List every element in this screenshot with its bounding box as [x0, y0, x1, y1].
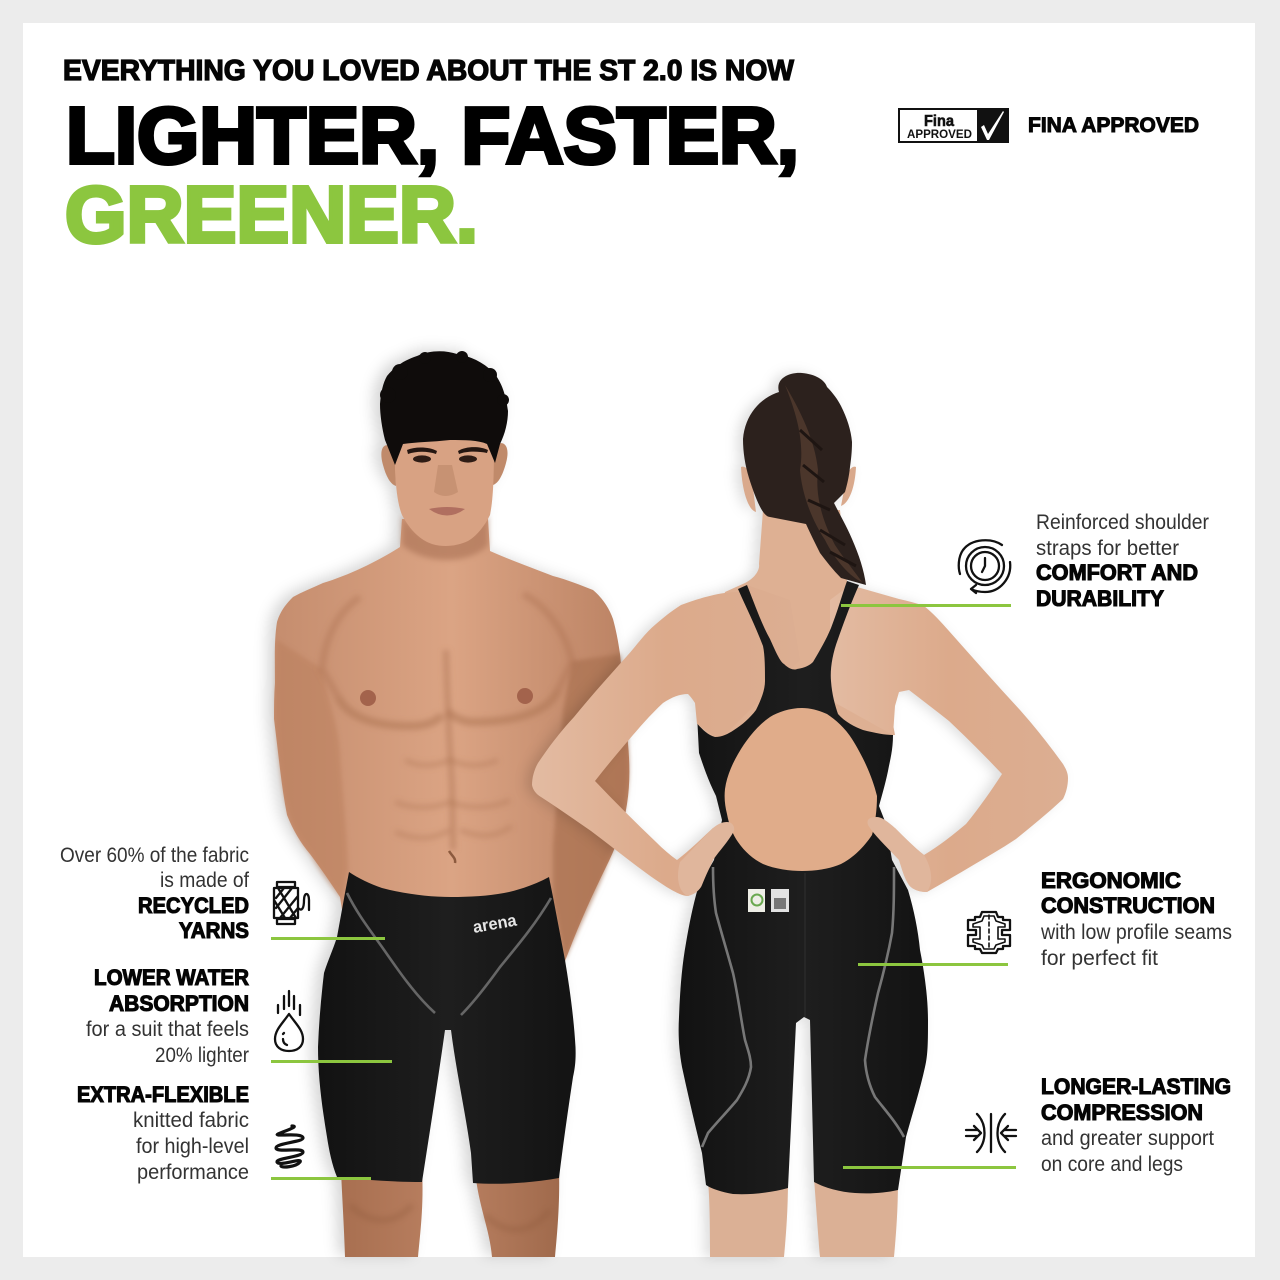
header text — [63, 55, 799, 259]
figure: female swimmer — [532, 373, 1068, 1257]
text block: LONGER-LASTING — [1041, 1074, 1231, 1099]
woman hands — [678, 817, 931, 896]
man knee shading — [350, 1205, 550, 1229]
text block: performance — [137, 1161, 249, 1184]
text block: knitted fabric — [133, 1109, 249, 1132]
woman legs — [708, 1178, 898, 1257]
man navel — [449, 851, 455, 863]
woman centre seam — [804, 873, 806, 1017]
text block: COMFORT AND — [1036, 560, 1198, 585]
man muscle shading — [322, 594, 572, 850]
text block — [77, 1082, 249, 1184]
text block: COMPRESSION — [1041, 1100, 1203, 1125]
callout: longer-lasting compression — [843, 1074, 1231, 1176]
icon: water drop — [275, 991, 303, 1051]
text block: and greater support — [1041, 1127, 1214, 1150]
badge label: FINA APPROVED — [1028, 114, 1199, 137]
badge icon — [899, 109, 1008, 142]
man hair — [380, 351, 509, 465]
text block — [60, 844, 249, 943]
man jammer shorts — [318, 872, 576, 1184]
text block: Reinforced shoulder — [1036, 511, 1209, 534]
woman suit — [679, 581, 928, 1194]
icon: spring — [276, 1126, 303, 1167]
man head — [395, 440, 494, 546]
callout: ergonomic construction — [858, 868, 1232, 970]
woman back skin — [697, 510, 895, 745]
woman hair — [743, 373, 866, 585]
main title line two: GREENER. — [65, 170, 478, 259]
FINA approved badge — [899, 109, 1199, 142]
pointer line — [271, 1177, 371, 1180]
text block: with low profile seams — [1040, 921, 1232, 944]
text block — [1041, 1074, 1231, 1176]
man shorts seams — [347, 893, 551, 1015]
man neck shadow — [402, 515, 488, 560]
badge icon: APPROVED — [907, 129, 972, 141]
pointer line — [843, 1166, 1016, 1169]
pointer line — [271, 937, 385, 940]
text block — [1036, 511, 1209, 611]
woman ears — [741, 467, 856, 512]
man nipples — [360, 688, 533, 706]
text block: for high-level — [136, 1135, 249, 1158]
text block: on core and legs — [1041, 1153, 1183, 1176]
text block: for a suit that feels — [86, 1018, 249, 1041]
man shorts logo: arena — [471, 910, 519, 937]
pointer line — [271, 1060, 392, 1063]
man face features — [407, 447, 488, 516]
badge icon: Fina — [924, 113, 954, 130]
pointer line — [841, 604, 1011, 607]
text block: LOWER WATER — [94, 965, 249, 990]
text block: CONSTRUCTION — [1041, 893, 1215, 918]
text block: straps for better — [1036, 537, 1179, 560]
text block — [86, 965, 249, 1067]
man arm shading left — [275, 640, 348, 900]
text block: Over 60% of the fabric — [60, 844, 249, 867]
icon: yarn spool — [274, 882, 309, 924]
text block: YARNS — [179, 918, 249, 943]
callout: lower water absorption — [86, 965, 392, 1067]
woman suit labels — [748, 889, 789, 912]
eyebrow heading: EVERYTHING YOU LOVED ABOUT THE ST 2.0 IS NOW — [63, 55, 795, 87]
text block: for perfect fit — [1041, 947, 1158, 970]
text block: is made of — [160, 869, 249, 892]
text block: EXTRA-FLEXIBLE — [77, 1082, 249, 1107]
figure: male swimmer — [274, 351, 629, 1257]
woman right arm — [830, 585, 1068, 892]
text block: DURABILITY — [1036, 586, 1164, 611]
text block: 20% lighter — [155, 1044, 249, 1067]
pointer line — [858, 963, 1008, 966]
text block: ABSORPTION — [109, 991, 249, 1016]
woman suit seams — [702, 867, 904, 1147]
woman braid — [785, 385, 862, 582]
text block: ERGONOMIC — [1041, 868, 1181, 893]
text block: RECYCLED — [138, 893, 249, 918]
callout: extra flexible — [77, 1082, 371, 1184]
man legs — [341, 1170, 559, 1257]
callout: recycled yarns — [60, 844, 385, 943]
icon: seam pattern — [968, 912, 1010, 953]
woman back opening — [725, 708, 877, 871]
woman left arm — [532, 585, 800, 896]
icon: compression arrows — [966, 1114, 1016, 1152]
man body and arms — [274, 519, 629, 975]
man arm shading right — [553, 654, 629, 960]
woman spine shading — [798, 640, 806, 860]
main title line one: LIGHTER, FASTER, — [66, 91, 799, 180]
man ears — [381, 443, 508, 486]
icon: stopwatch cycle — [959, 540, 1010, 593]
callout: comfort and durability — [841, 511, 1209, 611]
text block — [1040, 868, 1232, 970]
